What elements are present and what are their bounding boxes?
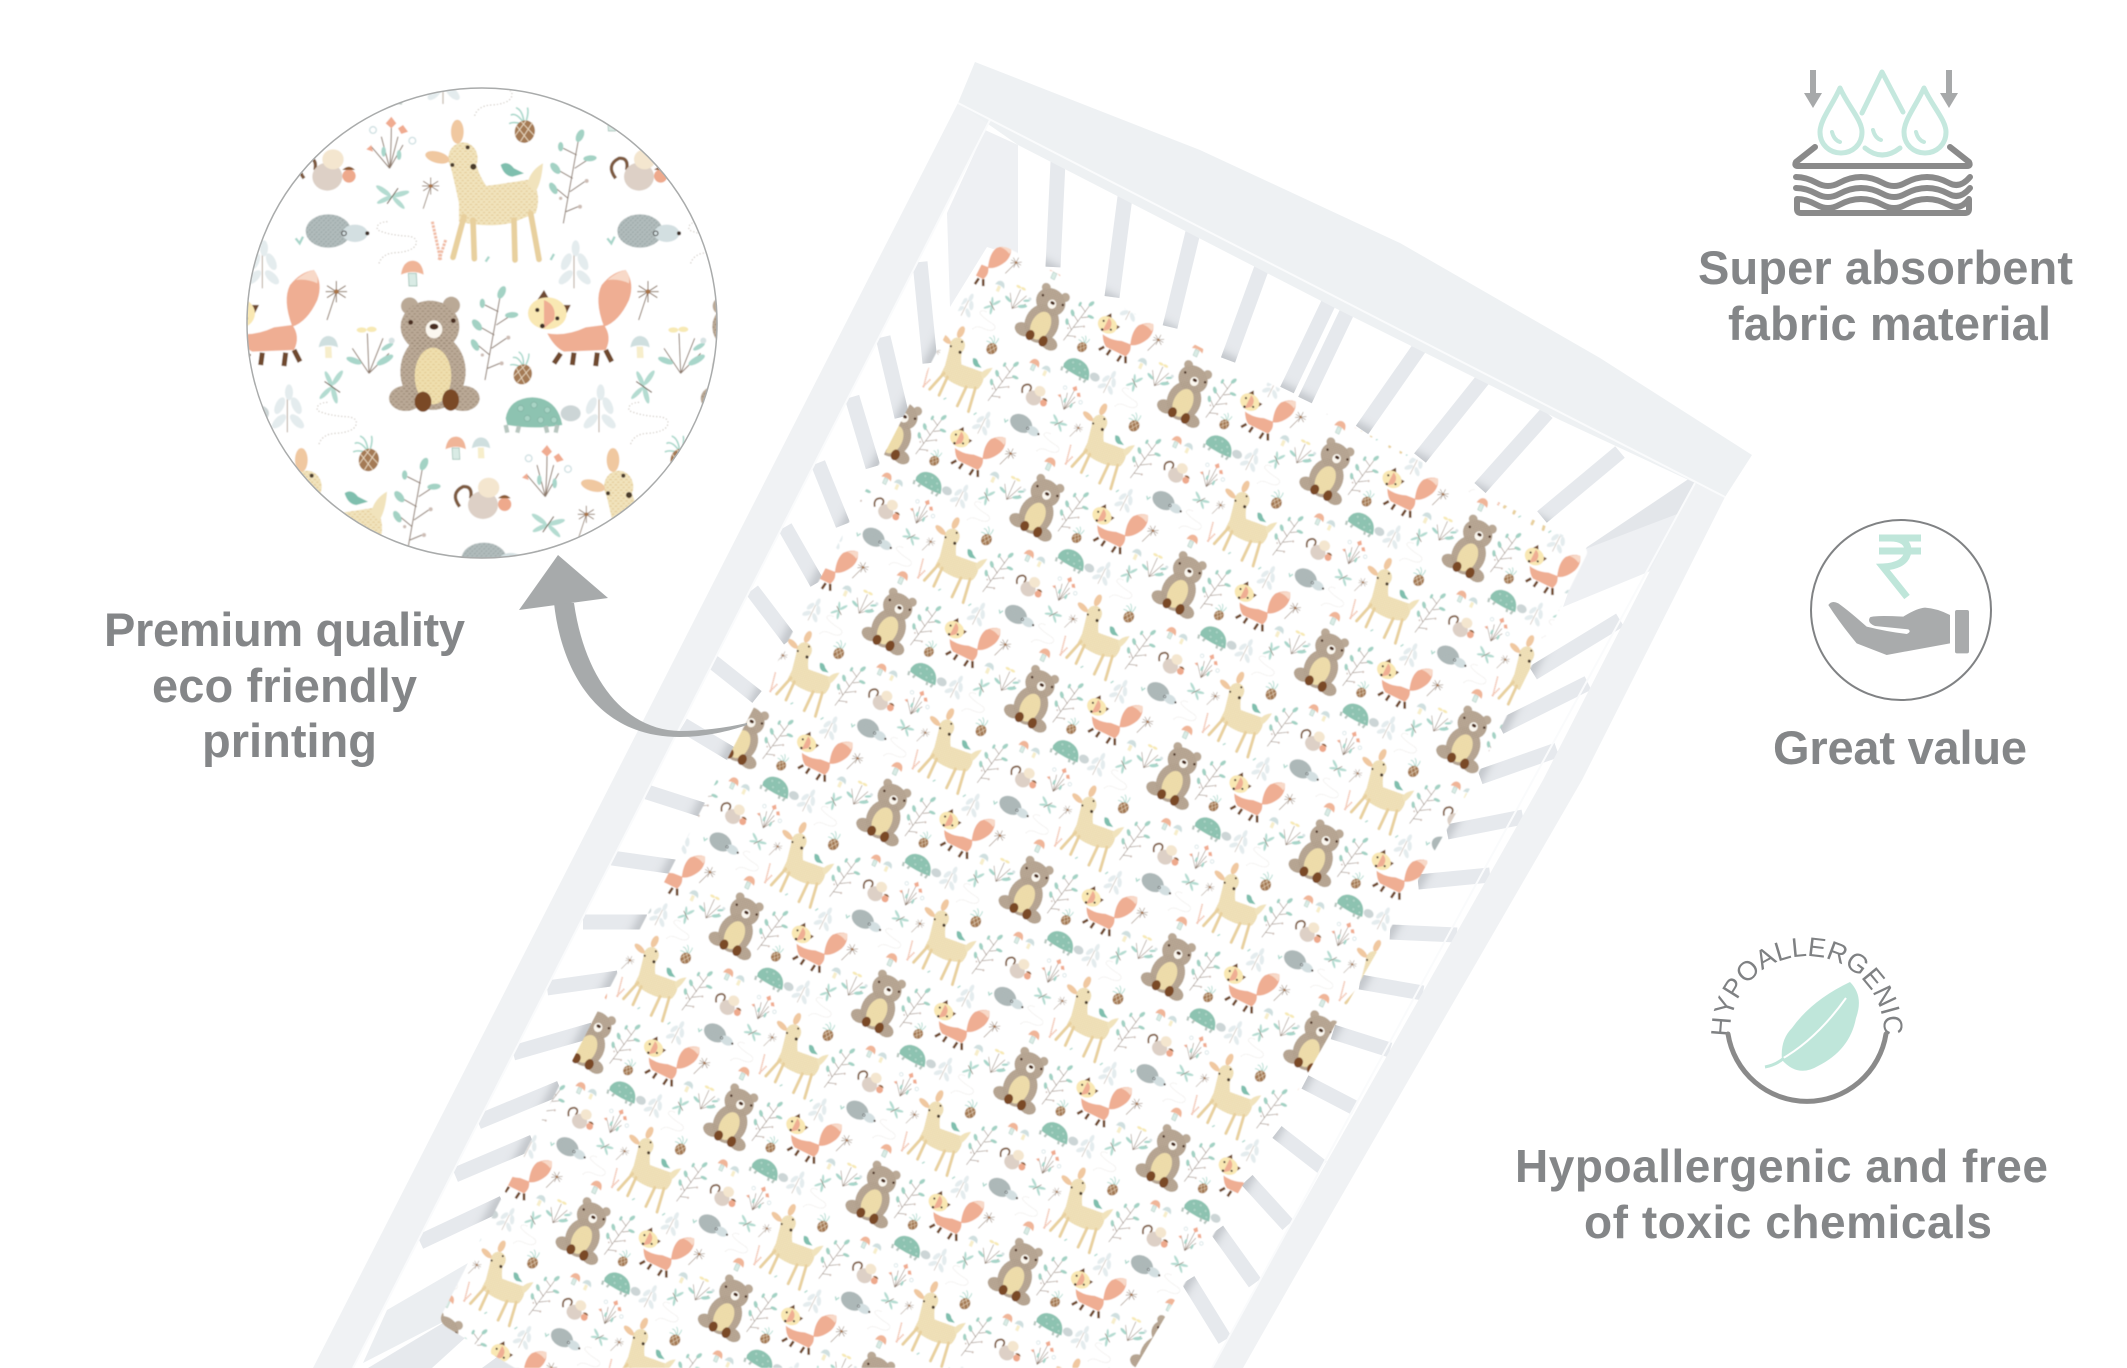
icon: hypoallergenic feather badge bbox=[1711, 938, 1902, 1104]
text: premium quality: eco friendly bbox=[152, 659, 417, 712]
crib top rail bbox=[958, 62, 1752, 497]
text: super absorbent: Super absorbent bbox=[1698, 241, 2073, 294]
text: premium quality: printing bbox=[202, 714, 377, 767]
text: great value: Great value bbox=[1773, 721, 2027, 774]
crib right rail bbox=[1212, 483, 1725, 1368]
icon: mattress layers bbox=[1795, 147, 1970, 213]
icon: rupee over hand bbox=[1811, 520, 1991, 700]
text: super absorbent bbox=[1698, 241, 2073, 350]
text: super absorbent: fabric material bbox=[1728, 297, 2051, 350]
crib inner corner posts bbox=[363, 130, 1722, 1368]
text: hypoallergenic and free: Hypoallergenic and free bbox=[1515, 1140, 2048, 1192]
magnified fabric print circle bbox=[247, 88, 717, 558]
icon: rupee sign bbox=[1879, 538, 1921, 597]
text: premium quality bbox=[104, 603, 465, 767]
text: hypoallergenic and free bbox=[1515, 1140, 2048, 1248]
icon: badge arc lettering: HYPOALLERGENIC bbox=[1711, 938, 1902, 1034]
icon: down arrows bbox=[1804, 70, 1958, 108]
icon: absorbent layers and water drops bbox=[1795, 70, 1970, 213]
crib slats bbox=[420, 162, 1620, 1368]
fitted sheet with woodland print bbox=[441, 247, 1587, 1368]
text: premium quality: Premium quality bbox=[104, 603, 465, 656]
icon: water drops bbox=[1820, 72, 1946, 155]
arrow from sheet to magnified circle bbox=[519, 555, 747, 737]
icon: badge arc bbox=[1728, 1034, 1886, 1101]
crib left rail bbox=[313, 103, 990, 1368]
icon: feather bbox=[1765, 982, 1859, 1071]
text: hypoallergenic and free: of toxic chemicals bbox=[1584, 1196, 1992, 1248]
icon: hand bbox=[1828, 602, 1969, 655]
crib frame bbox=[313, 62, 1752, 1368]
